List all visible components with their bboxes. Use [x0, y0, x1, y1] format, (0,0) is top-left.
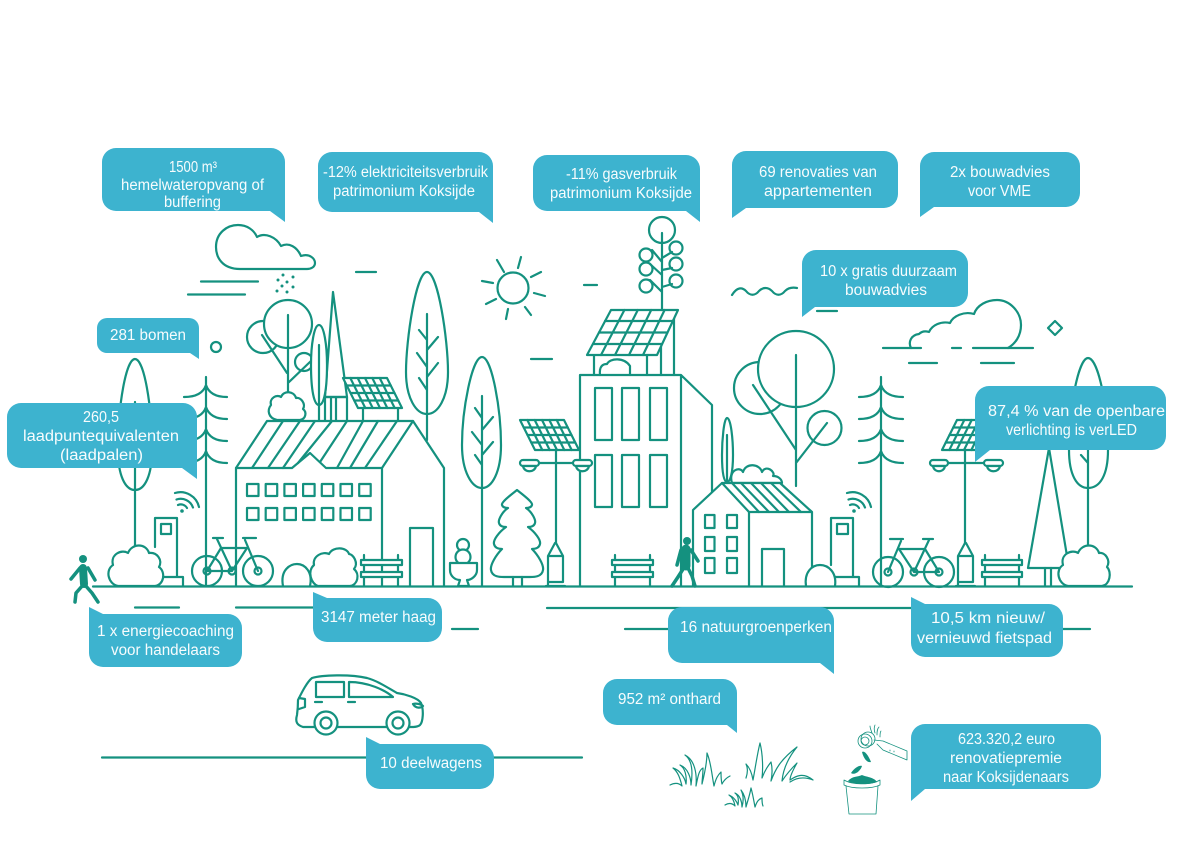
- callout: bouwadvies VME: [920, 152, 1080, 217]
- trees behind main house: [247, 292, 347, 420]
- callout: onthard: [603, 679, 737, 733]
- callout: elektriciteitsverbruik: patrimonium Koksijde: [333, 183, 475, 200]
- callout: onthard: 952 m² onthard: [618, 691, 721, 708]
- bush on main roof: [269, 392, 305, 420]
- callout: hemelwateropvang: hemelwateropvang of: [121, 177, 265, 194]
- decorative air marks: [211, 285, 837, 359]
- callout: deelwagens: 10 deelwagens: [380, 755, 482, 772]
- tree: left poplar: [118, 359, 152, 586]
- charging station left: [155, 492, 199, 586]
- shrub by charging station: [806, 565, 835, 586]
- person walking center: [672, 537, 698, 586]
- person walking left: [71, 555, 98, 602]
- ground line: [93, 585, 1132, 588]
- bicycle right: [873, 539, 954, 587]
- callout: hemelwateropvang: 1500 m³: [169, 159, 217, 176]
- callout: openbare verlichting: 87,4 % van de openbare: [988, 403, 1165, 420]
- callout: renovaties: [732, 151, 898, 218]
- callout: natuurgroenperken: 16 natuurgroenperken: [680, 619, 832, 636]
- fir tree: [491, 490, 543, 586]
- callout: laadpunten: [7, 403, 197, 479]
- callout: haag: 3147 meter haag: [321, 609, 436, 626]
- bench right: [982, 555, 1022, 586]
- street lamp with solar panel, center: [520, 420, 592, 586]
- callout: fietspad: [911, 597, 1063, 657]
- callout: natuurgroenperken: [668, 607, 834, 674]
- callout: laadpunten: laadpuntequivalenten: [23, 428, 179, 445]
- callout: fietspad: 10,5 km nieuw/: [931, 610, 1046, 627]
- icon: coins into flower pot: [844, 725, 907, 814]
- callout: deelwagens: [366, 737, 494, 789]
- callout: renovatiepremie: naar Koksijdenaars: [943, 769, 1069, 786]
- tree: tall poplar right of house: [406, 272, 448, 440]
- icon: sun: [482, 257, 545, 319]
- callout: bouwadvies VME: voor VME: [968, 183, 1031, 200]
- solar panel on main house: [343, 378, 402, 420]
- callout: gasverbruik: [533, 155, 700, 222]
- callout: elektriciteitsverbruik: [318, 152, 493, 223]
- callout: gratis bouwadvies: bouwadvies: [845, 282, 927, 299]
- street lamp with solar panel, right: [930, 420, 1003, 586]
- tree: left pine: [184, 377, 227, 586]
- callout: gratis bouwadvies: 10 x gratis duurzaam: [820, 263, 957, 280]
- tree: right pine: [859, 377, 903, 586]
- left bush: [108, 546, 163, 586]
- tree: right poplar: [1069, 358, 1108, 586]
- callout: gratis bouwadvies: [802, 250, 968, 317]
- callout: elektriciteitsverbruik: -12% elektriciteitsverbruik: [323, 164, 488, 181]
- icon: grass: [670, 743, 813, 807]
- bushes by main house: [282, 548, 357, 586]
- road lines: [102, 608, 1090, 758]
- icon: car: [296, 675, 423, 734]
- bench left: [361, 555, 402, 586]
- callout: renovaties: appartementen: [764, 183, 872, 200]
- callout: hemelwateropvang: buffering: [164, 194, 221, 211]
- building: small house: [693, 483, 812, 586]
- callout: laadpunten: 260,5: [83, 409, 119, 426]
- tree on tower roof: [640, 217, 682, 310]
- callout: renovatiepremie: 623.320,2 euro: [958, 731, 1055, 748]
- callout: energiecoaching: [89, 607, 242, 667]
- callout: renovatiepremie: renovatiepremie: [950, 750, 1062, 767]
- callout: openbare verlichting: [975, 386, 1166, 462]
- callout: fietspad: vernieuwd fietspad: [917, 630, 1052, 647]
- tree: poplar by the road: [462, 357, 501, 586]
- icon: right cloud: [883, 300, 1062, 363]
- callout: energiecoaching: 1 x energiecoaching: [97, 623, 234, 640]
- callout: hemelwateropvang: [102, 148, 285, 222]
- bench center: [612, 555, 653, 586]
- callout: laadpunten: (laadpalen): [60, 447, 143, 464]
- tree: cone tree: [1028, 448, 1069, 586]
- big tree right: [734, 331, 842, 486]
- callout: openbare verlichting: verlichting is verLED: [1006, 422, 1137, 439]
- callout: gasverbruik: patrimonium Koksijde: [550, 185, 692, 202]
- callout: gasverbruik: -11% gasverbruik: [566, 166, 677, 183]
- callout: renovatiepremie: [911, 724, 1101, 801]
- bicycle left: [192, 538, 273, 586]
- building: tower with solar roof: [580, 310, 712, 586]
- icon: rain cloud: [188, 225, 376, 294]
- callout: renovaties: 69 renovaties van: [759, 164, 877, 181]
- building: main house: [236, 421, 444, 586]
- callout: bomen: 281 bomen: [110, 327, 186, 344]
- planter: [450, 539, 477, 586]
- thin tree behind small house: [722, 418, 733, 482]
- callout: bouwadvies VME: 2x bouwadvies: [950, 164, 1050, 181]
- callout: haag: [313, 592, 442, 642]
- callout: energiecoaching: voor handelaars: [111, 642, 220, 659]
- callout: bomen: [97, 318, 199, 359]
- charging station right: [831, 492, 871, 586]
- right bush: [1058, 546, 1110, 586]
- bush on small house: [731, 465, 782, 483]
